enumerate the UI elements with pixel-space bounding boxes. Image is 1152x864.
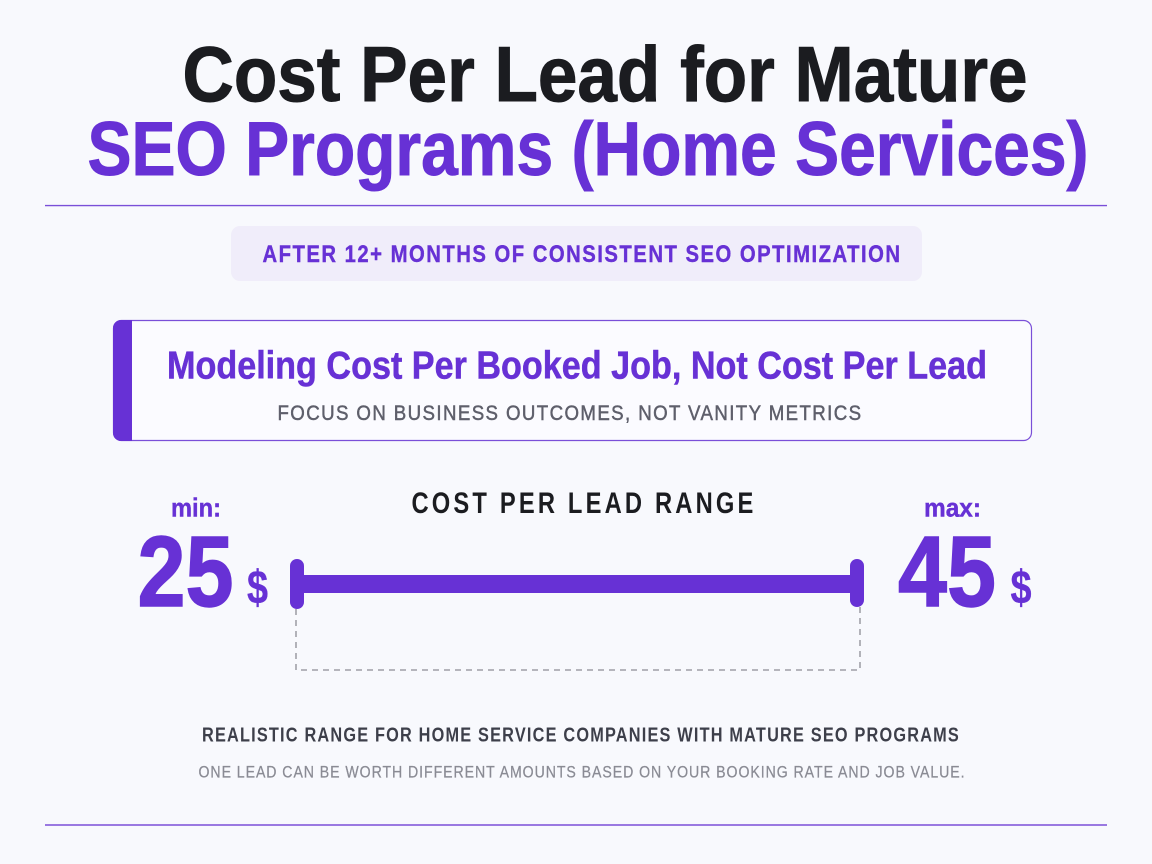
- footnote: ONE LEAD CAN BE WORTH DIFFERENT AMOUNTS BASED ON YOUR BOOKING RATE AND JOB VALUE.: [198, 764, 966, 782]
- max value: 45: [898, 516, 996, 628]
- title: Cost Per Lead for Mature: [182, 30, 1028, 118]
- subtitle pill: [231, 226, 922, 281]
- min value: min:: [171, 492, 221, 522]
- callout panel: FOCUS ON BUSINESS OUTCOMES, NOT VANITY METRICS: [278, 401, 862, 425]
- title: [88, 30, 1088, 192]
- max value: [898, 492, 1032, 628]
- range bar: [290, 559, 864, 609]
- callout panel: [113, 320, 1032, 441]
- min value: $: [247, 560, 268, 614]
- range description: REALISTIC RANGE FOR HOME SERVICE COMPANIES WITH MATURE SEO PROGRAMS: [202, 724, 960, 746]
- range heading: COST PER LEAD RANGE: [412, 487, 756, 520]
- max value: max:: [924, 492, 981, 522]
- min value: 25: [138, 516, 234, 628]
- dashed bracket: [296, 607, 860, 670]
- callout panel: Modeling Cost Per Booked Job, Not Cost Per Lead: [167, 344, 987, 388]
- max value: $: [1010, 560, 1032, 614]
- subtitle pill: AFTER 12+ MONTHS OF CONSISTENT SEO OPTIMIZATION: [262, 241, 902, 268]
